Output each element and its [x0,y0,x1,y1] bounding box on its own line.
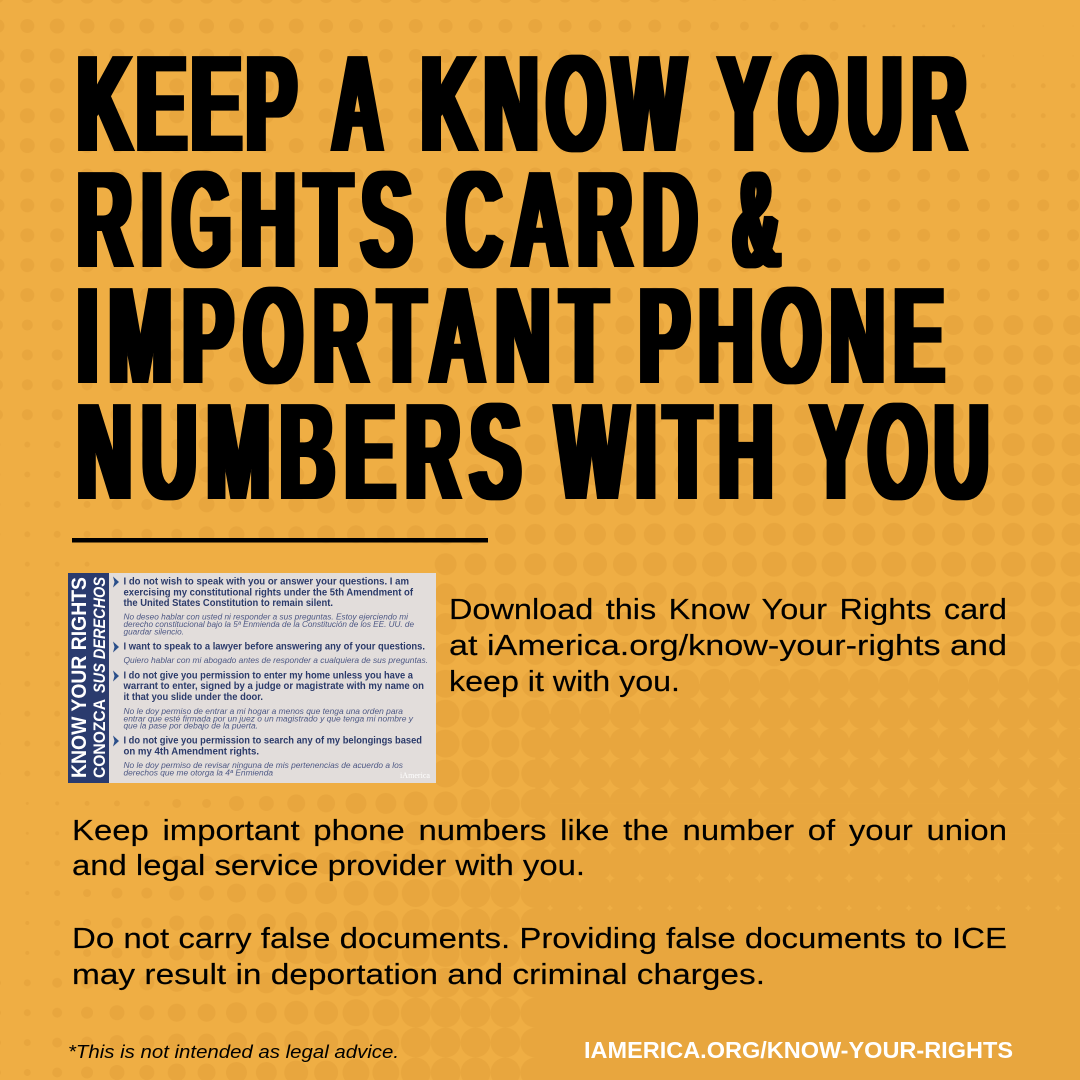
card logo: iAmerica [400,771,430,780]
card arrows [113,576,119,746]
title: IMPORTANT [77,258,607,413]
know your rights card image [68,573,436,783]
phone numbers text block: and legal service provider with you. [72,850,585,882]
card statements: I do not give you permission to search any of my belongings based [124,735,422,746]
website url: IAMERICA.ORG/KNOW-YOUR-RIGHTS [584,1037,1013,1063]
download text block: keep it with you. [449,666,680,698]
legal disclaimer: *This is not intended as legal advice. [68,1041,399,1062]
download text block [449,594,1007,698]
card statements: I do not give you permission to enter my home unless you have a [124,670,414,681]
title: YOUR [718,26,967,181]
card side banner: CONOZCA [90,699,109,778]
false documents text block: Do not carry false documents. Providing false documents to ICE [72,923,1007,955]
card statements: derecho constitucional bajo la 5ª Enmienda de la Constitución de los EE. UU. de [124,620,415,629]
card side banner: KNOW YOUR RIGHTS [68,577,91,778]
card statements: guardar silencio. [124,627,184,636]
download text block: Download this Know Your Rights card [449,594,1007,626]
title: KEEP [77,26,296,181]
card statements: derechos que me otorga la 4ª Enmienda [124,768,274,777]
title: & [733,142,780,296]
card statements: warrant to enter, signed by a judge or magistrate with my name on [123,681,424,692]
false documents text block: may result in deportation and criminal charges. [72,959,765,991]
card side banner: SUS DERECHOS [90,576,109,693]
title: YOU [811,374,989,529]
card statements: No le doy permiso de entrar a mi hogar a menos que tenga una orden para [124,707,404,716]
card side banner [68,573,109,783]
title: KNOW [421,26,685,181]
card statements [123,577,428,777]
card statements: entrar que esté firmada por un juez o un magistrado y que tenga mi nombre y [124,714,414,723]
divider rule [72,538,488,542]
card statements: No deseo hablar con usted ni responder a sus preguntas. Estoy ejerciendo mi [124,613,408,622]
download text block: at iAmerica.org/know-your-rights and [449,630,1007,662]
card statements: it that you slide under the door. [124,692,263,703]
card statements: I want to speak to a lawyer before answering any of your questions. [124,642,425,653]
false documents text block [72,923,1007,991]
title: CARD [447,142,697,297]
card statements: exercising my constitutional rights under the 5th Amendment of [124,587,414,598]
card statements: the United States Constitution to remain silent. [124,598,333,609]
card statements: Quiero hablar con mi abogado antes de responder a cualquiera de sus preguntas. [124,656,428,665]
card statements: on my 4th Amendment rights. [124,746,259,757]
title [77,26,989,529]
card statements: I do not wish to speak with you or answer your questions. I am [124,577,409,588]
title: WITH [556,374,773,529]
card statements: que la pase por debajo de la puerta. [124,722,258,731]
title: PHONE [639,258,944,413]
phone numbers text block [72,815,1007,882]
card statements: No le doy permiso de revisar ninguna de mis pertenencias de acuerdo a los [124,761,403,770]
phone numbers text block: Keep important phone numbers like the number of your union [72,815,1007,847]
title: A [332,27,382,181]
title: NUMBERS [77,374,521,529]
title: RIGHTS [77,142,412,297]
